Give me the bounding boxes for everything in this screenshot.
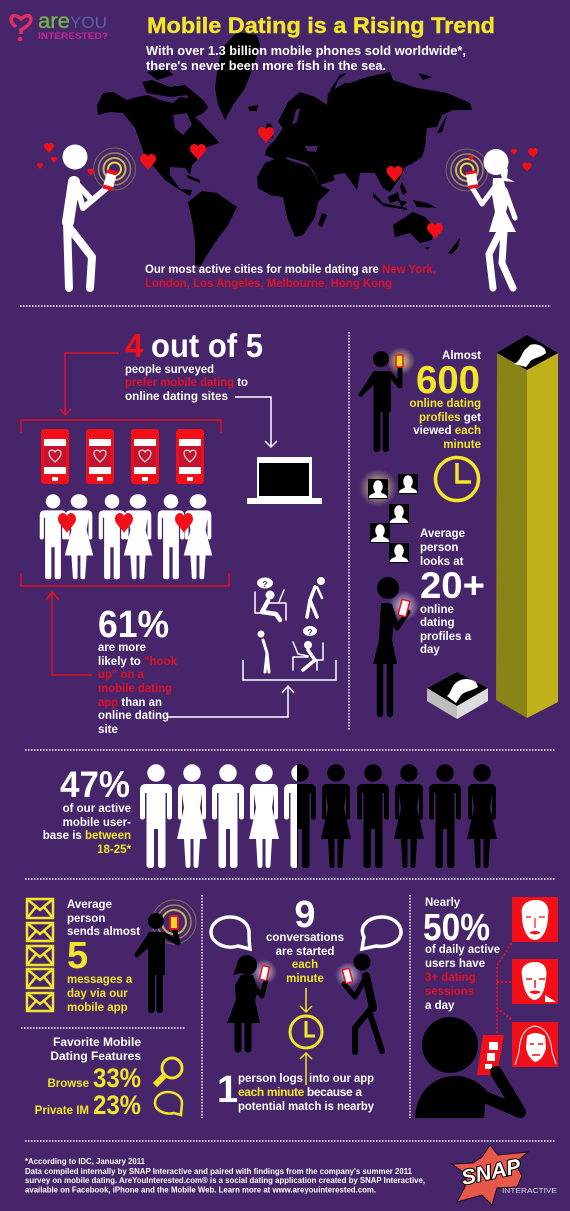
- logo: are you interested: YOU: [70, 13, 107, 32]
- stat: 9 conversations: 9: [294, 894, 316, 936]
- white bracket: [243, 660, 336, 680]
- stat: 5 messages: messages a: [67, 974, 133, 986]
- top red bracket: [21, 420, 221, 433]
- stat: 47%: of our active: [63, 803, 131, 815]
- figure: man with phone and rings: [134, 900, 196, 1013]
- stat: 61%: are more: [98, 642, 146, 654]
- stat: 61%: likely to "hook: [98, 656, 178, 668]
- stat: almost 600: minute: [443, 439, 481, 451]
- stat: 9 conversations: minute: [286, 973, 324, 985]
- stat: 9 conversations: are started: [276, 946, 334, 958]
- stat: 5 messages: 5: [67, 935, 88, 977]
- stat: almost 600: 600: [416, 359, 480, 402]
- icon: clock: [436, 458, 478, 500]
- stat: 61%: site: [98, 724, 118, 736]
- figure: big silhouette with phone: [415, 1017, 520, 1118]
- logo: SNAP Interactive: SNAP: [459, 1155, 524, 1190]
- stat: 47%: 18-25*: [97, 844, 132, 856]
- favorite features heading: [50, 1035, 141, 1063]
- footnote: survey on mobile dating. AreYouInterested.com® is a social dating application created by SNAP Interactive,: [25, 1175, 425, 1185]
- signal rings: [94, 148, 136, 190]
- arrow: red to phones: [60, 353, 119, 415]
- stat: 61%: online dating: [98, 710, 169, 722]
- small figures: online daters: ?: [263, 580, 268, 589]
- stat: almost 600: viewed each: [413, 425, 481, 437]
- stat: 20+ profiles: 20+: [420, 565, 485, 606]
- stat: 4 out of 5: 4: [125, 327, 144, 364]
- footnote: Data compiled internally by SNAP Interactive and paired with findings from the company's summer 2011: [25, 1166, 412, 1176]
- icon: speech bubble left: [211, 917, 250, 949]
- stat: 20+ profiles: profiles a: [420, 631, 472, 643]
- stat: 4 out of 5: out of 5: [151, 327, 263, 364]
- face tile: man: [512, 959, 558, 1004]
- stat: 47%: [43, 764, 132, 856]
- figure: man on phone: [335, 954, 382, 1052]
- stat: 5 messages: mobile app: [67, 1002, 128, 1014]
- stat: nearly 50%: 50%: [423, 907, 490, 949]
- stat: 1 person logs in: into our app: [309, 1071, 374, 1085]
- people row: 47% white, rest black: [140, 764, 497, 868]
- footnote: [25, 1156, 425, 1194]
- profile tiles: [359, 469, 418, 563]
- icon: magnifier: [155, 1058, 182, 1085]
- active cities text: [145, 264, 436, 290]
- tall profile stack: [496, 335, 558, 718]
- stat: 5 messages: Average: [67, 899, 112, 911]
- stat: almost 600: profiles get: [419, 412, 481, 424]
- stat: 1 person logs in: each minute because a: [238, 1085, 362, 1099]
- stat: 20+ profiles: dating: [420, 617, 454, 629]
- signal rings: [446, 149, 488, 191]
- icon: heart question mark: [11, 16, 31, 41]
- stat: 5 messages: day via our: [67, 988, 128, 1000]
- stat: 61%: [98, 604, 178, 736]
- footnote: available on Facebook, iPhone and the Mobile Web. Learn more at www.areyouinterested.com.: [25, 1184, 376, 1194]
- icon: clock small: [290, 1016, 322, 1048]
- favorite features heading: Favorite Mobile: [53, 1035, 141, 1049]
- stat: nearly 50%: sessions: [425, 986, 474, 998]
- stat: 61%: app than an: [98, 697, 162, 709]
- small figures: online daters: [255, 577, 325, 672]
- bottom red bracket: [21, 573, 229, 586]
- stat: 20+ profiles: Average: [420, 528, 465, 540]
- stat: 61%: mobile dating: [98, 683, 172, 695]
- stat: 20+ profiles: person: [420, 542, 458, 554]
- stat: nearly 50%: 3+ dating: [425, 972, 476, 984]
- stat: 4 out of 5: prefer mobile dating to: [125, 377, 248, 389]
- arrow: red up to couples: [46, 592, 92, 675]
- arrow: white to desktop users: [168, 686, 294, 717]
- figure: man holding lit phone: [358, 347, 415, 452]
- stat: 20+ profiles: [420, 528, 485, 656]
- face tile: woman one: [512, 897, 558, 942]
- features list: Private IM: [35, 1105, 89, 1117]
- small figures: online daters: ?: [308, 628, 313, 637]
- favorite features heading: Dating Features: [50, 1049, 141, 1063]
- stat: nearly 50%: users have: [425, 958, 485, 970]
- subtitle: [146, 44, 466, 73]
- title: Mobile Dating is a Rising Trend: [147, 13, 495, 38]
- logo: SNAP Interactive: [452, 1145, 557, 1205]
- stat: 5 messages: sends almost: [67, 926, 140, 938]
- stat: 9 conversations: [266, 894, 344, 985]
- features list: Browse: [47, 1078, 89, 1090]
- stat: 61%: up" on a: [98, 669, 145, 681]
- phones row: [41, 429, 204, 484]
- stat: nearly 50%: of daily active: [425, 944, 500, 956]
- stat: 4 out of 5: online dating sites: [125, 391, 228, 403]
- stat: almost 600: Almost: [442, 350, 481, 362]
- footnote: *According to IDC, January 2011: [25, 1156, 145, 1166]
- world map: [97, 32, 472, 267]
- stat: nearly 50%: Nearly: [425, 897, 461, 909]
- features list: [35, 1063, 141, 1120]
- logo: are you interested: [11, 10, 108, 41]
- stat: 1 person logs in: potential match is nearby: [238, 1099, 374, 1113]
- stat: 20+ profiles: online: [420, 604, 454, 616]
- stat: 47%: base is between: [43, 830, 131, 842]
- figure: woman with phone: [446, 148, 538, 288]
- stat: 47%: 47%: [60, 764, 130, 805]
- stat: 5 messages: [67, 899, 140, 1014]
- stat: 9 conversations: conversations: [266, 932, 344, 944]
- logo: are you interested: are: [38, 10, 70, 33]
- stat: 4 out of 5: [125, 327, 263, 403]
- logo: are you interested: INTERESTED?: [38, 31, 108, 41]
- icon: laptop: [247, 457, 322, 504]
- map hearts: [140, 127, 443, 239]
- stat: almost 600: online dating: [409, 398, 481, 410]
- features list: 33%: [93, 1063, 141, 1093]
- stat: 1 person logs in: [217, 1069, 374, 1113]
- icon: envelopes: [27, 899, 53, 1011]
- stat: 1 person logs in: 1: [217, 1069, 238, 1111]
- active cities text: London, Los Angeles, Melbourne, Hong Kong: [145, 278, 392, 290]
- arrow: white to laptop: [235, 397, 277, 447]
- figure: woman on phone: [227, 955, 277, 1049]
- arrow: up to clock: [300, 1053, 312, 1085]
- icon: chat bubble yellow: [155, 1092, 182, 1115]
- subtitle: there's never been more fish in the sea.: [146, 59, 386, 73]
- dotted connector lines: [497, 943, 512, 1033]
- stat: 5 messages: person: [67, 913, 105, 925]
- stat: 4 out of 5: people surveyed: [125, 364, 214, 376]
- stat: 9 conversations: each: [292, 959, 318, 971]
- stat: almost 600: [409, 350, 481, 451]
- arrow: down to clock: [300, 988, 312, 1012]
- stat: nearly 50%: a day: [425, 1000, 455, 1012]
- face tile: woman two: [512, 1022, 558, 1067]
- icon: speech bubble right: [362, 917, 401, 949]
- features list: 23%: [93, 1090, 141, 1120]
- couples with hearts: [40, 494, 212, 579]
- figure: man with phone: [37, 143, 136, 288]
- stat: 20+ profiles: looks at: [420, 556, 464, 568]
- stat: 20+ profiles: day: [420, 644, 440, 656]
- stat: nearly 50%: [423, 897, 500, 1012]
- subtitle: With over 1.3 billion mobile phones sold worldwide*,: [146, 44, 466, 58]
- stat: 61%: 61%: [98, 604, 169, 646]
- stat: 47%: mobile user-: [63, 817, 131, 829]
- active cities text: Our most active cities for mobile dating are New York,: [145, 264, 436, 276]
- logo: SNAP Interactive: INTERACTIVE: [502, 1186, 557, 1195]
- stat: 1 person logs in: person logs: [238, 1071, 303, 1085]
- small profile stack: [427, 672, 488, 719]
- figure: woman with phone: [373, 577, 419, 714]
